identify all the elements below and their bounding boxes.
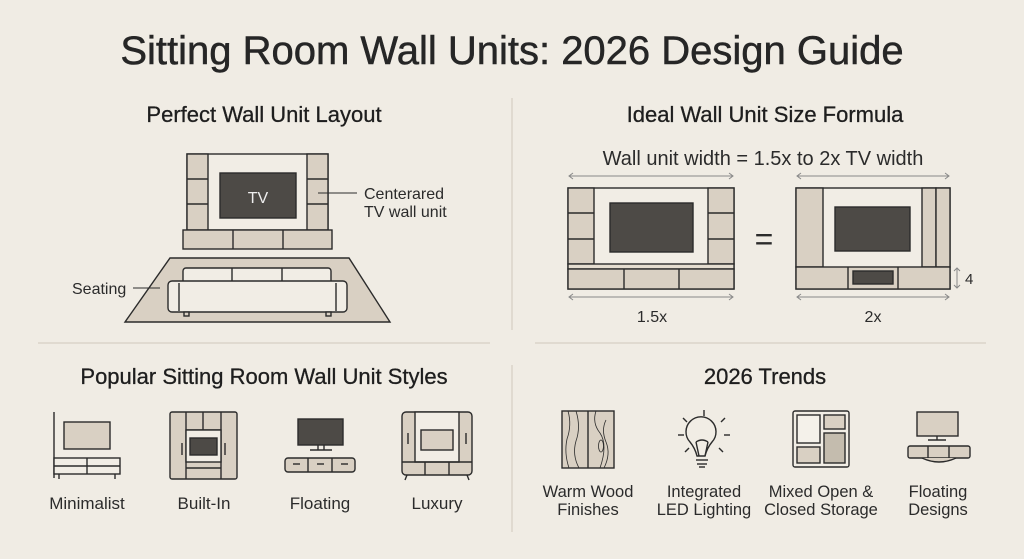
diagram: 1.5x unit: 1.5x [637, 309, 667, 326]
diagram: 2x unit: 2x [865, 309, 881, 326]
wall unit illustration [183, 154, 332, 249]
icon: warm wood: Warm Wood [543, 483, 633, 501]
panel: size formula [568, 102, 973, 326]
panel: 2026 trends [543, 364, 970, 519]
icon: led lighting [657, 410, 751, 519]
icon: led lighting: LED Lighting [657, 501, 751, 519]
callout: centered tv wall unit [318, 186, 447, 221]
panel: popular styles [49, 364, 472, 513]
icon: floating designs [908, 412, 970, 519]
rug and sofa [125, 258, 390, 322]
icon: mixed storage: Mixed Open & [769, 483, 873, 501]
icon: built-in: Built-In [178, 494, 230, 513]
callout: centered tv wall unit: TV wall unit [364, 204, 447, 221]
callout: seating: Seating [72, 281, 126, 298]
formula text: Wall unit width = 1.5x to 2x TV width [603, 148, 923, 170]
icon: mixed storage: Closed Storage [764, 501, 878, 519]
diagram: 2x unit [796, 173, 973, 326]
callout: centered tv wall unit: Centerared [364, 186, 444, 203]
icon: floating designs: Designs [908, 501, 968, 519]
icon: minimalist [49, 412, 125, 513]
icon: floating: Floating [290, 494, 350, 513]
icon: floating designs: Floating [909, 483, 967, 501]
diagram: 2x unit: 4 [965, 271, 973, 288]
heading: layout: Perfect Wall Unit Layout [146, 102, 382, 127]
title: Sitting Room Wall Units: 2026 Design Guide [120, 29, 904, 73]
icon: led lighting: Integrated [667, 483, 741, 501]
icon: luxury [402, 412, 472, 513]
wall unit illustration: TV [248, 190, 269, 207]
heading: trends: 2026 Trends [704, 364, 826, 389]
icon: minimalist: Minimalist [49, 494, 125, 513]
icon: warm wood [543, 411, 633, 519]
icon: mixed storage [764, 411, 878, 519]
equals sign: = [755, 221, 773, 257]
icon: floating [285, 419, 355, 513]
icon: luxury: Luxury [411, 494, 463, 513]
icon: warm wood: Finishes [557, 501, 619, 519]
diagram: 1.5x unit [568, 173, 734, 326]
icon: built-in [170, 412, 237, 513]
panel: perfect wall unit layout [72, 102, 447, 322]
heading: styles: Popular Sitting Room Wall Unit Styles [80, 364, 448, 389]
heading: formula: Ideal Wall Unit Size Formula [627, 102, 904, 127]
callout: seating [72, 281, 160, 298]
